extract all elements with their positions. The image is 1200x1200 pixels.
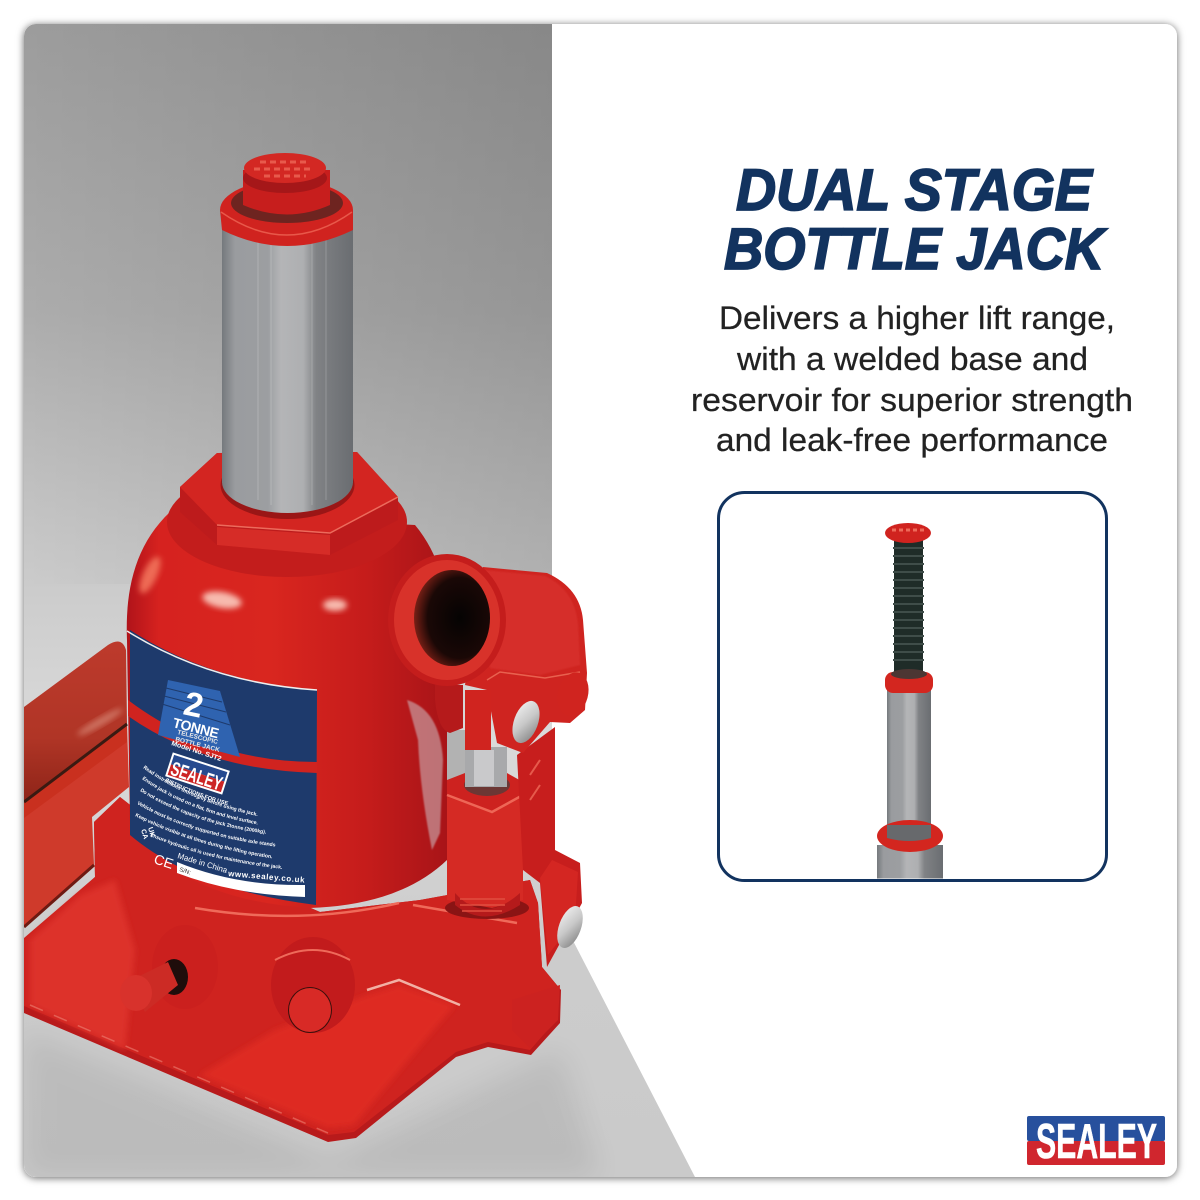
title: BOTTLE JACK — [724, 217, 1108, 282]
jack base plate — [24, 797, 561, 1142]
description text: with a welded base and — [736, 341, 1088, 377]
pump link arm — [517, 727, 582, 967]
top saddle and collar — [220, 153, 353, 246]
label sealey badge — [164, 752, 230, 797]
title — [724, 158, 1108, 282]
label instructions: Ensure hydraulic oil is used for maintenance of the jack. — [150, 833, 282, 869]
label marks and website — [139, 826, 306, 897]
description text: and leak-free performance — [716, 422, 1108, 458]
label on bottle — [126, 630, 317, 905]
base boss — [271, 937, 355, 1033]
illustration: red bottle jack — [24, 153, 589, 1142]
icon: outer steel tube — [877, 820, 943, 878]
label tonnage block: TONNE — [171, 714, 221, 741]
label model number: Model No. SJT2 — [170, 740, 222, 763]
hex nut collar — [167, 452, 407, 577]
icon: inner steel tube — [885, 669, 933, 826]
label marks and website: www.sealey.co.uk — [227, 869, 306, 885]
label marks and website: CE — [152, 851, 176, 872]
label instructions — [135, 765, 282, 869]
label tonnage block: BOTTLE JACK — [175, 736, 221, 754]
label marks and website: Made in China — [176, 851, 229, 875]
panel: grey studio backdrop — [24, 24, 695, 1177]
label instructions: Ensure jack is used on a flat, firm and level surface. — [142, 776, 258, 824]
description text: Delivers a higher lift range, — [719, 300, 1115, 336]
label instructions: Vehicle must be correctly supported on suitable axle stands — [138, 801, 276, 846]
label instructions: Read instructions thoroughly before using the jack. — [143, 765, 258, 816]
jack bottle body — [127, 512, 447, 908]
socket ring — [388, 554, 506, 686]
label tonnage block: TELESCOPIC — [177, 729, 219, 746]
description text: reservoir for superior strength — [691, 382, 1133, 418]
steel ram — [220, 225, 354, 519]
label tonnage block: 2 — [180, 685, 207, 726]
label marks and website: UK — [146, 826, 156, 838]
label marks and website: CA — [139, 828, 149, 840]
title: DUAL STAGE — [736, 158, 1094, 223]
inset panel: telescopic ram detail — [718, 492, 1106, 880]
label marks and website: S/N: — [178, 867, 192, 877]
label instructions: Keep vehicle visible at all times during the lifting operation. — [135, 813, 272, 858]
pump socket arm — [435, 567, 587, 753]
jack handle tubes — [24, 641, 129, 927]
icon: extended screw — [885, 523, 931, 674]
pump cylinder and rod — [445, 747, 529, 919]
label instructions: Do not exceed the capacity of the jack 2tonne (2000kg). — [140, 788, 266, 834]
release valve — [130, 959, 188, 1011]
label tonnage block — [158, 680, 240, 757]
label instructions: INSTRUCTIONS FOR USE — [165, 778, 228, 806]
description text — [691, 300, 1133, 458]
pivot pins — [512, 672, 589, 948]
label sealey badge: SEALEY — [168, 758, 225, 796]
